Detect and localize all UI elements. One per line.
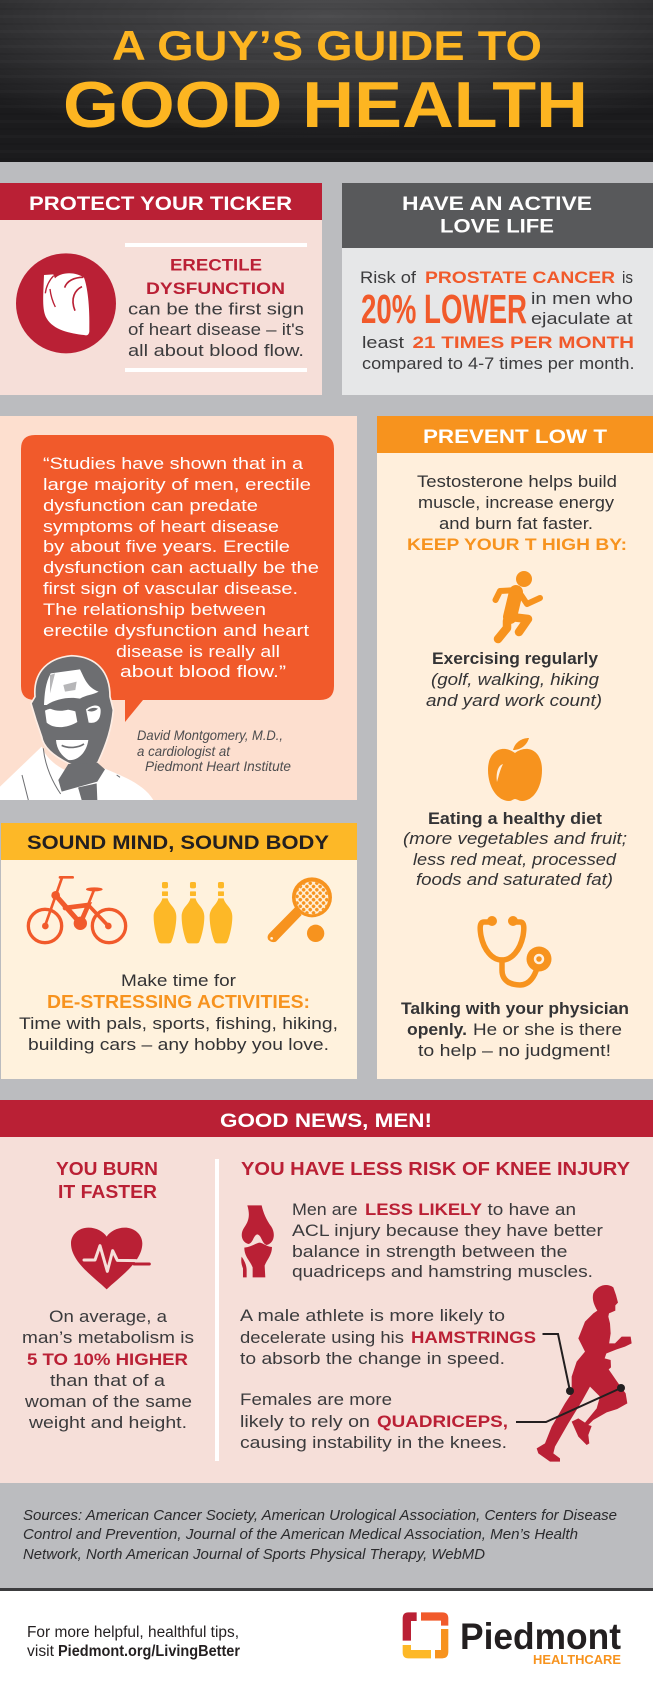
text: testosterone intro	[407, 473, 627, 554]
subheading: knee injury: YOU HAVE LESS RISK OF KNEE INJURY	[241, 1159, 630, 1179]
text: metabolism: man’s metabolism is	[22, 1329, 194, 1347]
sources: Network, North American Journal of Sports Physical Therapy, WebMD	[23, 1547, 485, 1563]
panel: have an active love life	[342, 183, 653, 395]
text: de-stressing activities: building cars – any hobby you love.	[28, 1036, 329, 1054]
panel: prevent low t	[377, 416, 653, 1079]
text: hamstrings: HAMSTRINGS	[411, 1328, 536, 1347]
text: testosterone intro: KEEP YOUR T HIGH BY:	[407, 536, 627, 554]
title: A GUY’S GUIDE TO	[112, 22, 542, 69]
heading: have an active love life: LOVE LIFE	[440, 216, 554, 238]
quote text: dysfunction can actually be the	[43, 558, 319, 577]
attribution	[137, 727, 291, 774]
title	[63, 22, 588, 141]
text: talking with physician: Talking with your physician	[401, 1000, 629, 1018]
text: talking with physician: to help – no judgment!	[418, 1042, 611, 1060]
text: testosterone intro: and burn fat faster.	[439, 515, 593, 533]
text: erectile dysfunction: all about blood flow.	[128, 342, 304, 360]
text: erectile dysfunction: DYSFUNCTION	[146, 279, 285, 298]
text: prostate cancer statistic: in men who	[531, 290, 633, 308]
text: talking with physician: openly.	[407, 1021, 467, 1039]
subheading: you burn it faster: IT FASTER	[58, 1182, 157, 1202]
quote text: erectile dysfunction and heart	[43, 621, 309, 640]
icon: stethoscope	[480, 916, 552, 985]
quote text: symptoms of heart disease	[43, 517, 279, 536]
text: exercising regularly	[426, 650, 602, 710]
text: quadriceps: likely to rely on	[240, 1413, 370, 1431]
quote text: first sign of vascular disease.	[43, 579, 298, 598]
attribution: a cardiologist at	[137, 743, 231, 759]
logo: Piedmont Healthcare	[403, 1612, 621, 1667]
title: GOOD HEALTH	[63, 68, 588, 141]
icon: anatomical heart	[16, 253, 116, 353]
footer text: For more helpful, healthful tips,	[27, 1624, 239, 1641]
quote text: large majority of men, erectile	[43, 475, 311, 494]
subheading: you burn it faster	[56, 1159, 158, 1202]
icon: heart with pulse	[71, 1228, 149, 1289]
icon: knee joint	[241, 1205, 274, 1277]
text: prostate cancer statistic: 20% LOWER	[361, 286, 527, 332]
text: quadriceps	[240, 1391, 508, 1452]
text: prostate cancer statistic: least	[362, 334, 404, 352]
text: acl injury: to have an	[488, 1201, 576, 1219]
text: healthy diet: Eating a healthy diet	[428, 810, 603, 828]
panel: protect your ticker	[0, 183, 322, 395]
subheading: you burn it faster: YOU BURN	[56, 1159, 158, 1179]
text: prostate cancer statistic: compared to 4-7 times per month.	[362, 355, 634, 373]
text: exercising regularly: and yard work count)	[426, 692, 602, 710]
quote text: “Studies have shown that in a	[43, 454, 304, 473]
attribution: David Montgomery, M.D.,	[137, 727, 283, 743]
panel: physician quote	[0, 416, 357, 800]
quote text: disease is really all	[116, 642, 280, 661]
text: prostate cancer statistic: Risk of	[360, 269, 416, 287]
text: hamstrings	[240, 1307, 536, 1368]
text: erectile dysfunction: ERECTILE	[170, 256, 262, 274]
heading: have an active love life	[402, 193, 592, 238]
text: metabolism: woman of the same	[24, 1393, 192, 1411]
text: healthy diet: foods and saturated fat)	[416, 871, 613, 889]
icon: bowling pins	[154, 882, 232, 943]
text: hamstrings: decelerate using his	[240, 1329, 404, 1347]
text: acl injury	[292, 1200, 604, 1281]
text: acl injury: LESS LIKELY	[365, 1200, 483, 1219]
heading: sound mind, sound body: SOUND MIND, SOUND BODY	[27, 833, 329, 854]
text: hamstrings: A male athlete is more likely to	[240, 1307, 505, 1325]
text: erectile dysfunction: of heart disease – it's	[128, 321, 304, 339]
heading: good news, men: GOOD NEWS, MEN!	[220, 1110, 432, 1132]
icon: bicycle	[28, 877, 126, 943]
footer text	[27, 1624, 240, 1660]
text: talking with physician	[401, 1000, 629, 1060]
logo: Piedmont Healthcare: HEALTHCARE	[533, 1652, 621, 1667]
text: quadriceps: causing instability in the knees.	[240, 1434, 507, 1452]
text: metabolism	[22, 1308, 194, 1432]
text: acl injury: balance in strength between the	[292, 1243, 568, 1261]
text: acl injury: quadriceps and hamstring muscles.	[292, 1263, 593, 1281]
footer text: visit	[27, 1643, 55, 1660]
text: acl injury: ACL injury because they have better	[292, 1222, 604, 1240]
text: hamstrings: to absorb the change in speed.	[240, 1350, 505, 1368]
heading: prevent low t: PREVENT LOW T	[423, 426, 607, 448]
sources: Control and Prevention, Journal of the American Medical Association, Men’s Health	[23, 1527, 578, 1543]
text: prostate cancer statistic: 21 TIMES PER MONTH	[412, 334, 634, 352]
text: de-stressing activities	[19, 972, 338, 1054]
text: testosterone intro: Testosterone helps build	[417, 473, 617, 491]
footer	[0, 1588, 653, 1692]
text: erectile dysfunction: can be the first sign	[128, 300, 304, 318]
sources: Sources: American Cancer Society, American Urological Association, Centers for Disease	[23, 1508, 617, 1524]
text: prostate cancer statistic: PROSTATE CANCER	[425, 269, 615, 287]
text: talking with physician: He or she is there	[473, 1021, 622, 1039]
sources	[23, 1508, 617, 1563]
attribution: Piedmont Heart Institute	[145, 758, 291, 774]
panel: good news, men	[0, 1100, 653, 1483]
text: prostate cancer statistic	[360, 269, 634, 373]
logo: Piedmont Healthcare: Piedmont	[460, 1616, 621, 1657]
icon: racket and ball	[268, 877, 332, 942]
quote text: dysfunction can predate	[43, 496, 258, 515]
text: quadriceps: QUADRICEPS,	[377, 1412, 508, 1431]
text: prostate cancer statistic: is	[622, 269, 633, 287]
footer text: Piedmont.org/LivingBetter	[58, 1643, 240, 1660]
quote text: about blood flow.”	[120, 662, 286, 681]
quote text	[43, 454, 319, 681]
header banner	[0, 0, 653, 162]
text: acl injury: Men are	[292, 1201, 358, 1219]
text: de-stressing activities: Make time for	[121, 972, 237, 990]
speech bubble	[21, 435, 334, 722]
icon: apple	[488, 738, 542, 801]
heading: have an active love life: HAVE AN ACTIVE	[402, 193, 592, 215]
text: de-stressing activities: DE-STRESSING ACTIVITIES:	[47, 992, 310, 1012]
icon: running man with callout lines	[516, 1285, 632, 1462]
text: testosterone intro: muscle, increase energy	[418, 494, 615, 512]
text: metabolism: weight and height.	[28, 1414, 187, 1432]
text: metabolism: than that of a	[50, 1372, 166, 1390]
portrait: David Montgomery	[0, 656, 153, 800]
text: prostate cancer statistic: ejaculate at	[531, 310, 633, 328]
text: de-stressing activities: Time with pals, sports, fishing, hiking,	[19, 1015, 338, 1033]
icon: runner	[496, 571, 540, 639]
quote text: by about five years. Erectile	[43, 537, 290, 556]
text: healthy diet: (more vegetables and fruit;	[403, 830, 627, 848]
text: metabolism: On average, a	[49, 1308, 168, 1326]
text: exercising regularly: Exercising regularly	[432, 650, 599, 668]
text: quadriceps: Females are more	[240, 1391, 392, 1409]
text: erectile dysfunction	[125, 243, 307, 372]
panel: sound mind, sound body	[1, 823, 357, 1079]
text: healthy diet	[403, 810, 627, 889]
quote text: The relationship between	[43, 600, 266, 619]
text: exercising regularly: (golf, walking, hiking	[431, 671, 600, 689]
heading: protect your ticker: PROTECT YOUR TICKER	[29, 193, 292, 215]
text: metabolism: 5 TO 10% HIGHER	[27, 1350, 188, 1369]
text: healthy diet: less red meat, processed	[413, 851, 617, 869]
